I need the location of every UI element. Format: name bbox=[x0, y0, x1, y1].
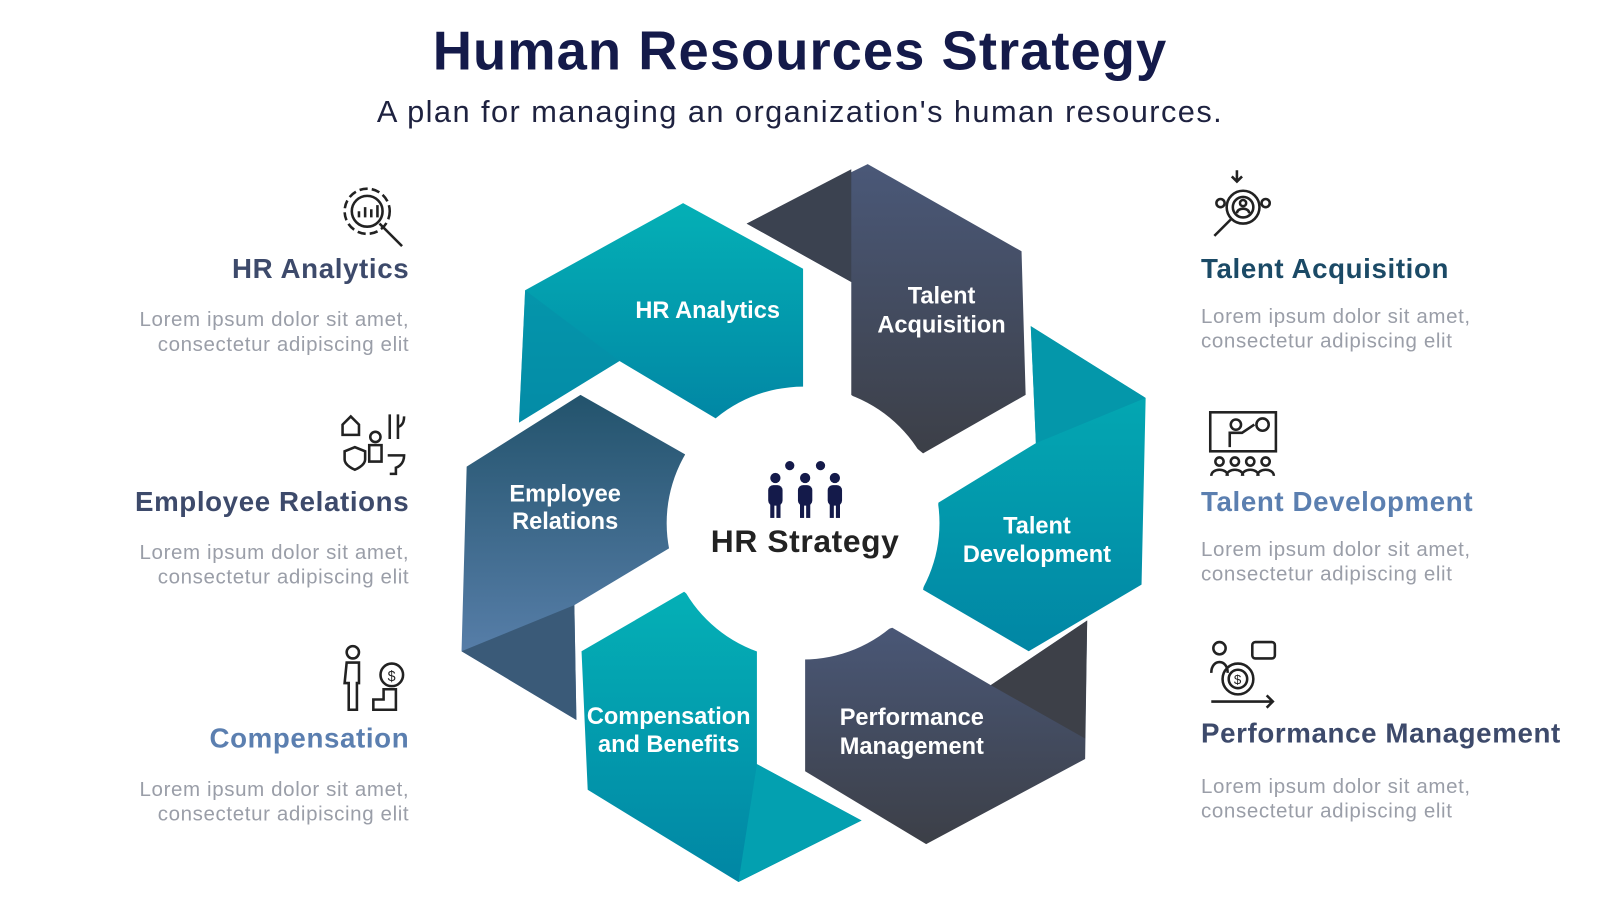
text: Lorem ipsum dolor sit amet, bbox=[1201, 538, 1471, 561]
heading: Compensation bbox=[210, 723, 409, 754]
segment: Compensation and Benefits: and Benefits bbox=[598, 731, 739, 757]
left item: Employee Relations bbox=[135, 414, 409, 589]
text: Lorem ipsum dolor sit amet, bbox=[140, 309, 409, 331]
segment: Performance Management: Performance bbox=[840, 704, 984, 730]
icon bbox=[341, 414, 406, 476]
text bbox=[1201, 538, 1471, 586]
text: consectetur adipiscing elit bbox=[158, 566, 409, 589]
segment: Employee Relations: Employee bbox=[509, 481, 621, 507]
icon bbox=[1210, 640, 1276, 709]
segment: Performance Management bbox=[805, 621, 1087, 844]
right item: Talent Acquisition bbox=[1201, 170, 1471, 353]
center: HR Strategy: HR Strategy bbox=[711, 523, 899, 559]
text bbox=[140, 778, 409, 826]
icon: $ bbox=[388, 669, 396, 685]
icon bbox=[343, 644, 404, 711]
text: consectetur adipiscing elit bbox=[158, 803, 409, 826]
title: Human Resources Strategy bbox=[433, 22, 1167, 82]
segment: HR Analytics: HR Analytics bbox=[635, 297, 780, 323]
text: consectetur adipiscing elit bbox=[1201, 563, 1453, 586]
segment: Performance Management: Management bbox=[840, 733, 984, 759]
heading: Employee Relations bbox=[135, 486, 409, 517]
segment: Talent Development: Talent bbox=[1003, 512, 1071, 538]
text: consectetur adipiscing elit bbox=[1201, 800, 1453, 823]
text: consectetur adipiscing elit bbox=[1201, 330, 1453, 353]
text: consectetur adipiscing elit bbox=[158, 333, 409, 356]
segment: Compensation and Benefits bbox=[582, 592, 862, 882]
heading: HR Analytics bbox=[232, 253, 409, 284]
left item: Compensation bbox=[140, 644, 409, 826]
segment: Compensation and Benefits: Compensation bbox=[587, 703, 751, 729]
segment: Employee Relations: Relations bbox=[512, 508, 618, 534]
segment: Employee Relations bbox=[462, 395, 685, 720]
heading: Performance Management bbox=[1201, 718, 1561, 749]
right item: Talent Development bbox=[1201, 411, 1473, 586]
icon bbox=[1214, 170, 1271, 237]
heading: Talent Acquisition bbox=[1201, 253, 1449, 284]
icon bbox=[1208, 411, 1278, 476]
icon: gear chart magnifier bbox=[343, 187, 403, 247]
text bbox=[140, 542, 409, 589]
text: Lorem ipsum dolor sit amet, bbox=[1201, 306, 1471, 328]
segment: Talent Acquisition: Acquisition bbox=[877, 311, 1006, 337]
segment: Talent Acquisition: Talent bbox=[908, 283, 976, 309]
left item: HR Analytics bbox=[140, 187, 409, 356]
text bbox=[1201, 306, 1471, 353]
segment: Talent Development: Development bbox=[963, 541, 1111, 567]
heading: Talent Development bbox=[1201, 486, 1473, 517]
icon: $ bbox=[1234, 672, 1242, 687]
center: HR Strategy bbox=[711, 461, 899, 559]
segment: Talent Development bbox=[923, 326, 1146, 651]
subtitle: A plan for managing an organization's human resources. bbox=[377, 95, 1223, 129]
text bbox=[140, 309, 409, 356]
segment: Talent Acquisition bbox=[747, 164, 1026, 453]
text: Lorem ipsum dolor sit amet, bbox=[140, 778, 409, 801]
text: Lorem ipsum dolor sit amet, bbox=[1201, 775, 1471, 798]
segment: HR Analytics bbox=[519, 203, 803, 423]
right item: Performance Management bbox=[1201, 640, 1561, 823]
text bbox=[1201, 775, 1471, 823]
text: Lorem ipsum dolor sit amet, bbox=[140, 542, 409, 564]
